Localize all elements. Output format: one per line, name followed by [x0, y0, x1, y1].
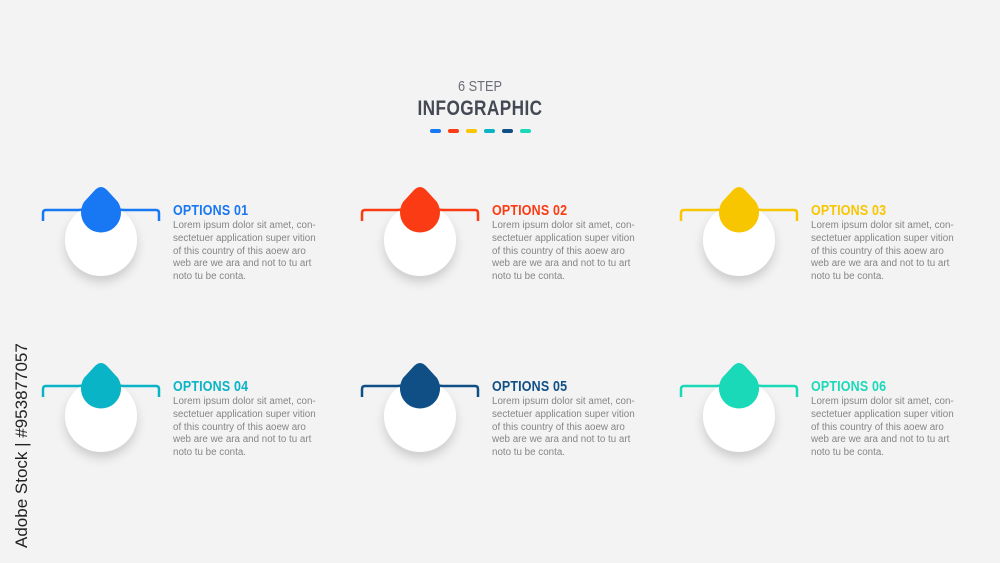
option 01 [42, 187, 316, 286]
option 05 [360, 363, 635, 462]
option 03: Lorem ipsum dolor sit amet, con-sectetuer application super vition of this country of this aoew aro web are we ara and not to tu art noto tu be conta. [811, 220, 954, 282]
title: 6 STEP [458, 78, 502, 95]
option 06 [680, 363, 954, 462]
option 03 [680, 187, 954, 286]
title: INFOGRAPHIC [417, 97, 543, 120]
option 06: Lorem ipsum dolor sit amet, con-sectetuer application super vition of this country of this aoew aro web are we ara and not to tu art noto tu be conta. [811, 396, 954, 458]
option 05: Lorem ipsum dolor sit amet, con-sectetuer application super vition of this country of this aoew aro web are we ara and not to tu art noto tu be conta. [492, 396, 635, 458]
option 04 [42, 363, 316, 462]
option 02: OPTIONS 02 [492, 203, 567, 219]
option 06: OPTIONS 06 [811, 379, 886, 395]
color dash legend [430, 129, 531, 133]
option 01: OPTIONS 01 [173, 203, 248, 219]
option 04: Lorem ipsum dolor sit amet, con-sectetuer application super vition of this country of this aoew aro web are we ara and not to tu art noto tu be conta. [173, 396, 316, 458]
option 03: OPTIONS 03 [811, 203, 886, 219]
option 02 [360, 187, 635, 286]
option 05: OPTIONS 05 [492, 379, 567, 395]
option 01: Lorem ipsum dolor sit amet, con-sectetuer application super vition of this country of this aoew aro web are we ara and not to tu art noto tu be conta. [173, 220, 316, 282]
option 04: OPTIONS 04 [173, 379, 248, 395]
side watermark text: Adobe Stock | #953877057 [12, 343, 31, 548]
option 02: Lorem ipsum dolor sit amet, con-sectetuer application super vition of this country of this aoew aro web are we ara and not to tu art noto tu be conta. [492, 220, 635, 282]
title [417, 78, 543, 120]
